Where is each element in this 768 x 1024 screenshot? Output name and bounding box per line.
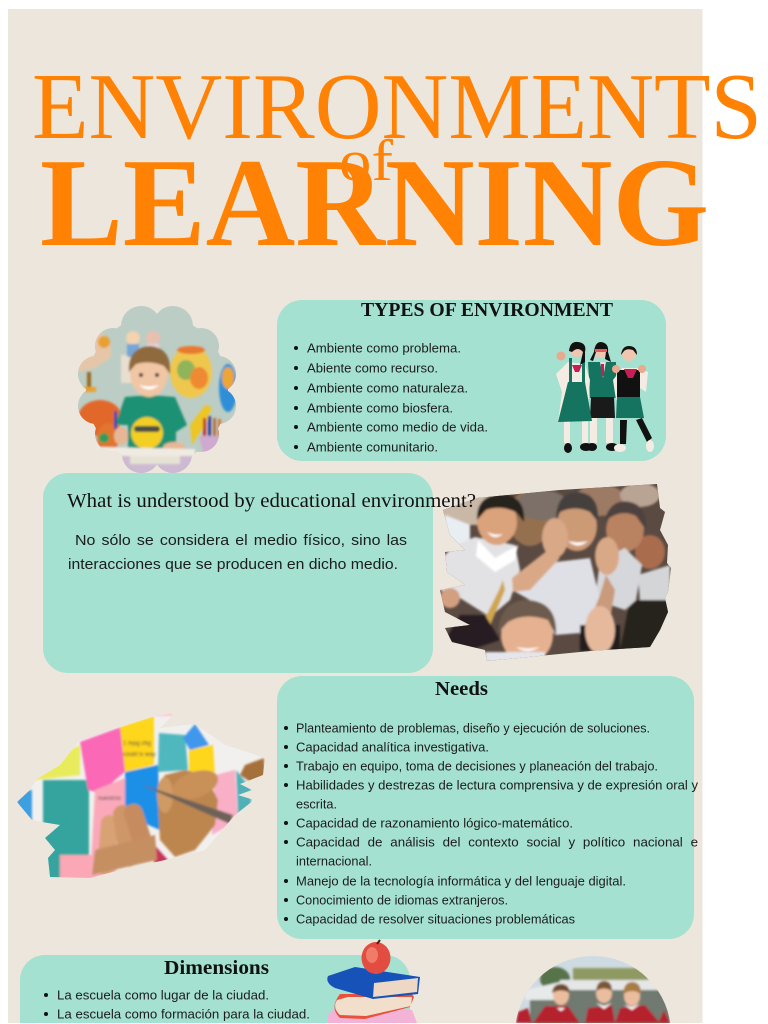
photo: boy at desk in scalloped frame	[78, 306, 236, 473]
bottom page margin	[0, 1023, 768, 1024]
list: needs	[284, 720, 699, 926]
icon: books and apple	[327, 940, 420, 1023]
photo: hands writing on sticky notes: 1 mpg chg	[123, 741, 151, 747]
panel: needs	[277, 676, 699, 939]
heading: what is understood: What is understood by educational environment?	[67, 490, 476, 512]
photo: hands writing on sticky notes: nuestros	[98, 796, 121, 802]
list: needs: Conocimiento de idiomas extranjeros.	[296, 892, 508, 908]
photo: children running in red uniforms	[516, 956, 670, 1023]
list: types of environment: Ambiente como naturaleza.	[307, 380, 468, 396]
list: dimensions	[44, 988, 310, 1022]
paragraph: definition: interacciones que se producen en dicho medio.	[68, 557, 398, 573]
list: types of environment: Ambiente comunitario.	[307, 440, 438, 454]
panel: dimensions	[20, 955, 410, 1023]
heading: needs: Needs	[435, 678, 488, 700]
illustration: three schoolgirls	[556, 342, 654, 453]
list: needs: Capacidad de resolver situaciones problemáticas	[296, 912, 575, 926]
text block: educational environment	[67, 490, 476, 573]
list: types of environment	[294, 340, 488, 454]
list: needs: Planteamiento de problemas, diseño y ejecución de soluciones.	[296, 720, 650, 736]
list: dimensions: La escuela como lugar de la ciudad.	[57, 988, 269, 1002]
list: types of environment: Ambiente como biosfera.	[307, 400, 453, 416]
title: ENVIRONMENTS	[32, 55, 762, 159]
photo: hands writing on sticky notes: could is way	[123, 752, 156, 758]
list: needs: Capacidad de análisis del contexto social y político nacional e	[296, 834, 698, 850]
photo: hands writing on sticky notes	[15, 710, 270, 885]
panel: educational environment	[43, 473, 433, 673]
title	[32, 55, 762, 273]
list: types of environment: Ambiente como problema.	[307, 340, 461, 356]
photo: group of smiling students	[435, 480, 675, 665]
list: types of environment: Abiente como recurso.	[307, 360, 438, 376]
panel: types of environment	[277, 299, 666, 461]
title: LEARNING	[40, 134, 709, 273]
list: needs: Manejo de la tecnología informática y del lenguaje digital.	[296, 874, 626, 888]
list: dimensions: La escuela como formación para la ciudad.	[57, 1006, 310, 1022]
title: of	[339, 128, 394, 193]
paragraph: definition	[68, 533, 407, 573]
list: needs: Trabajo en equipo, toma de decisiones y planeación del trabajo.	[296, 758, 658, 774]
list: needs: internacional.	[296, 854, 372, 868]
list: types of environment: Ambiente como medio de vida.	[307, 420, 488, 434]
heading: dimensions: Dimensions	[164, 957, 269, 979]
list: needs: escrita.	[296, 796, 337, 812]
list: needs: Capacidad analítica investigativa.	[296, 740, 489, 754]
list: needs: Habilidades y destrezas de lectura comprensiva y de expresión oral y	[296, 778, 699, 792]
heading: types of environment: TYPES OF ENVIRONMENT	[361, 299, 614, 321]
paragraph: definition: No sólo se considera el medio físico, sino las	[75, 533, 407, 549]
list: needs: Capacidad de razonamiento lógico-matemático.	[296, 816, 573, 830]
